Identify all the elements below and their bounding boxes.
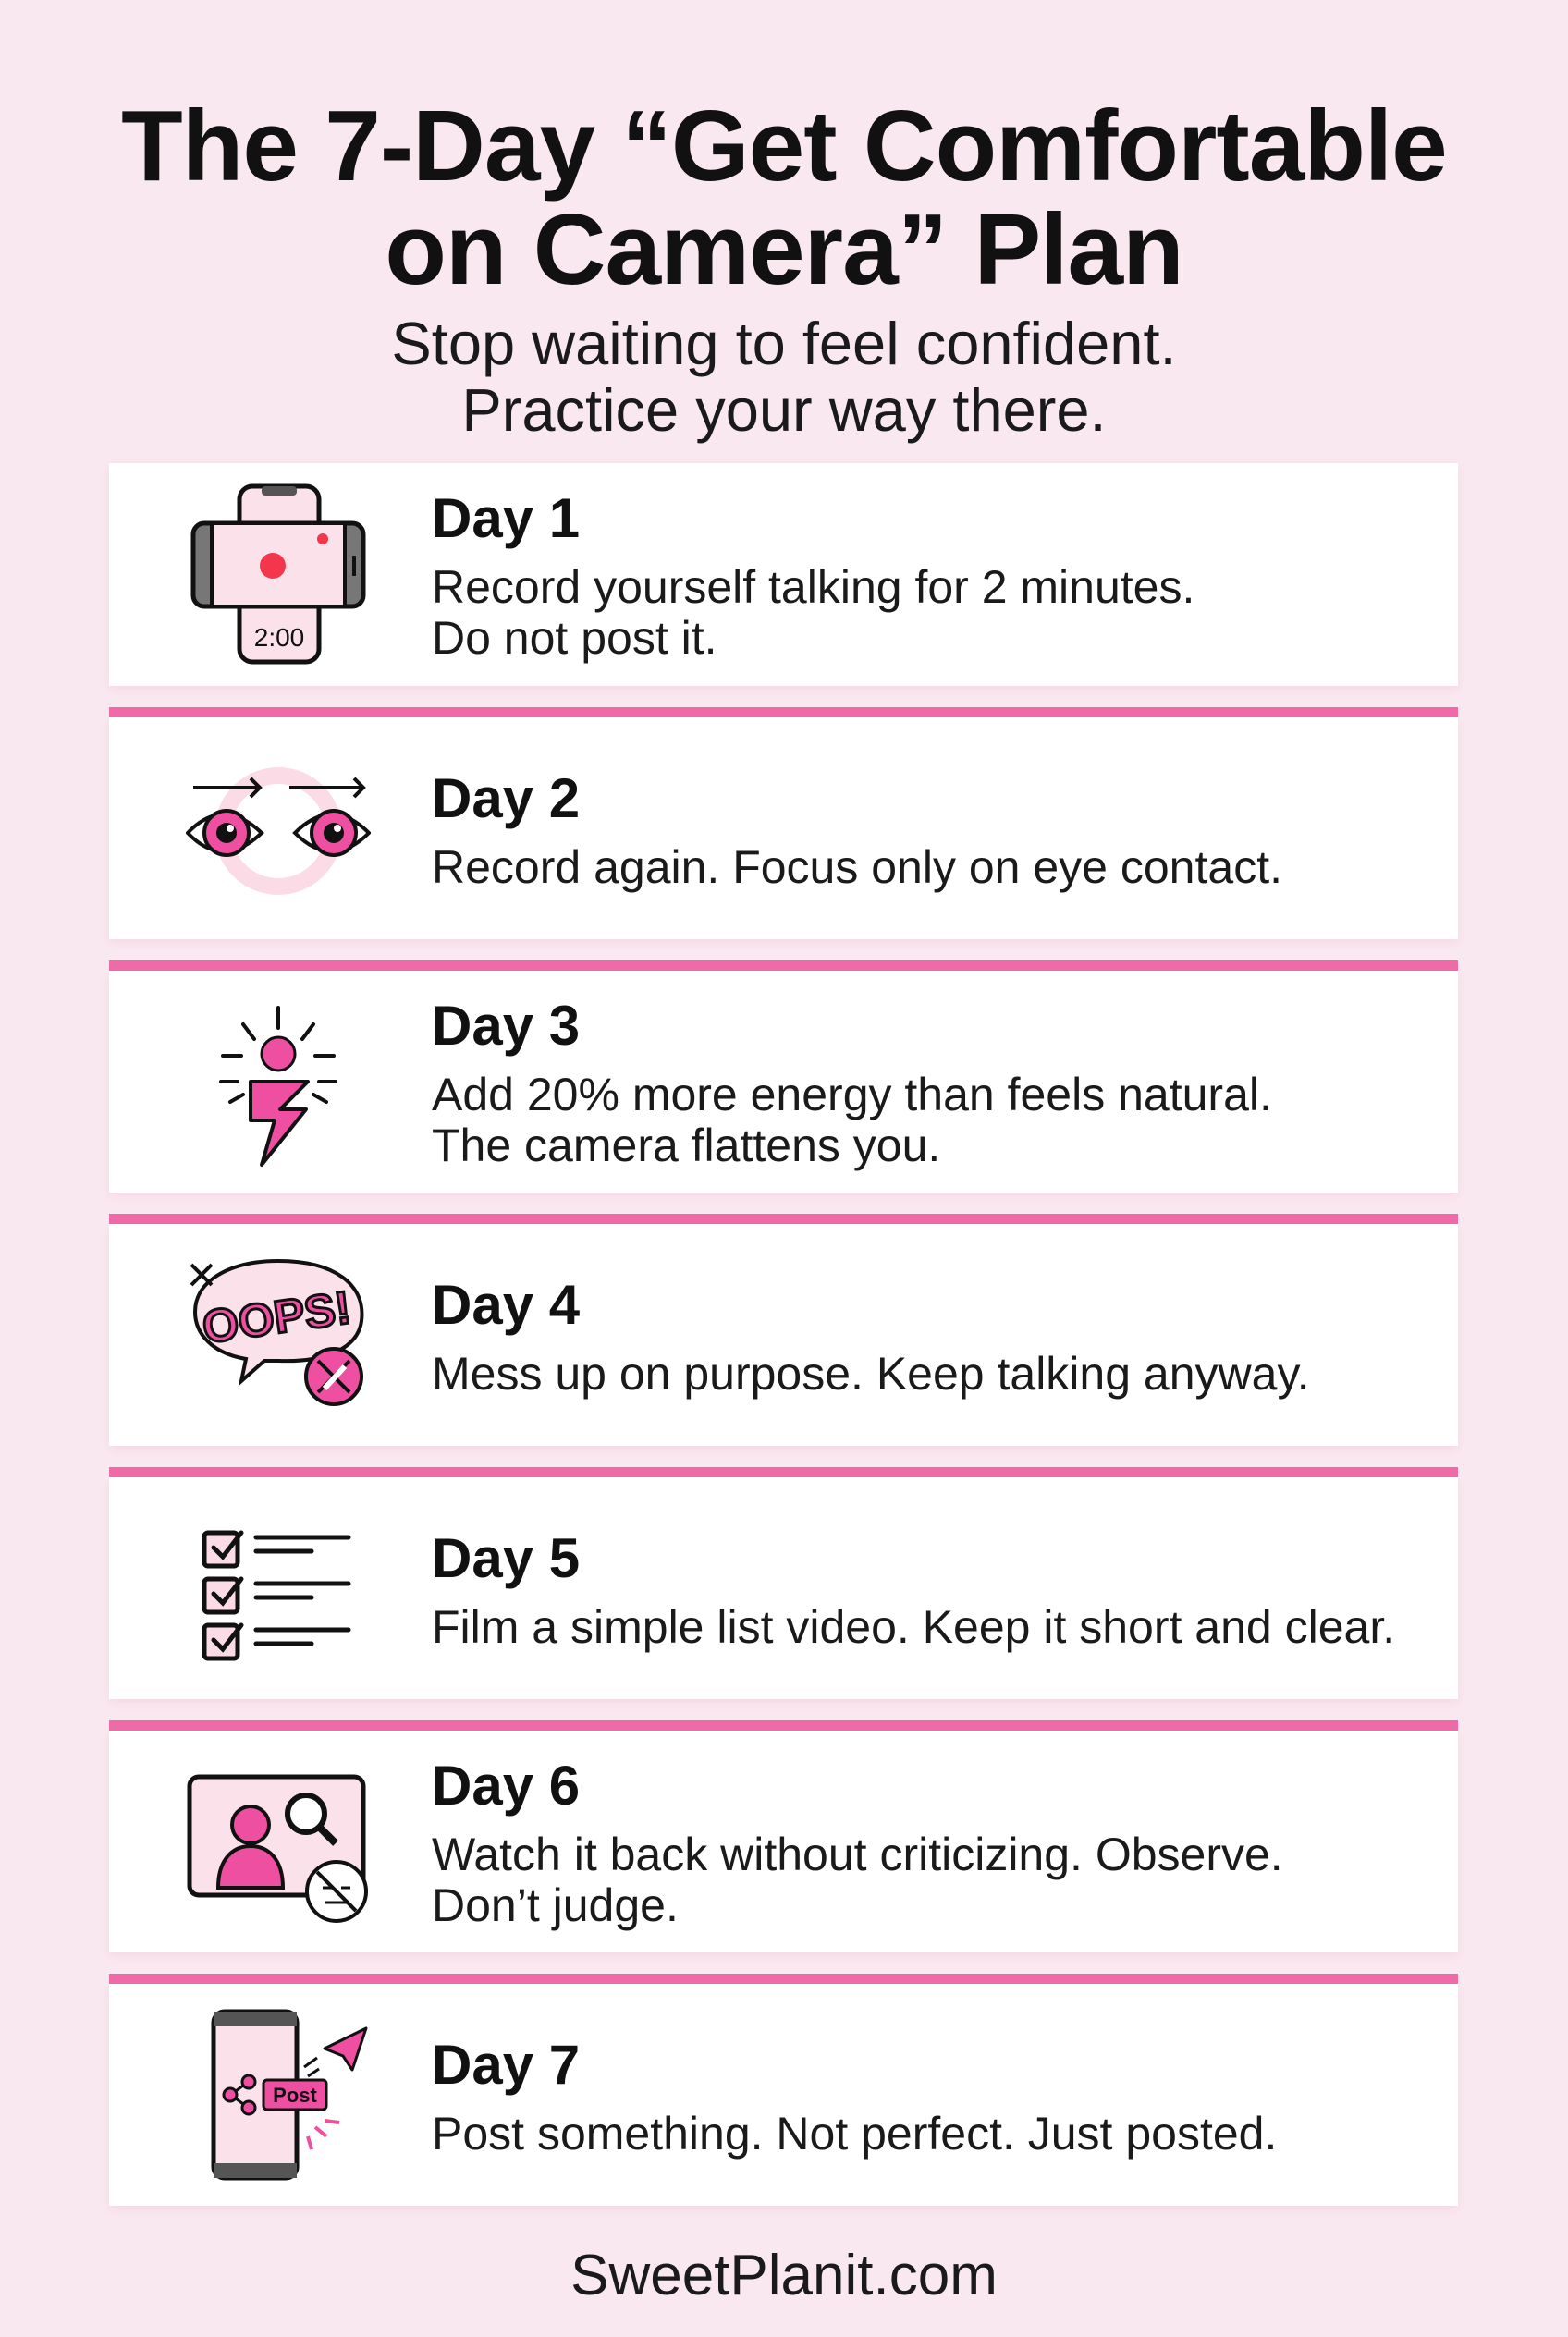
text: day 6 xyxy=(432,1755,1283,1931)
text: day 4: Day 4 xyxy=(432,1274,580,1335)
divider bar 2 xyxy=(109,960,1458,971)
icon: post phone: Post xyxy=(273,2084,318,2107)
text: day 6: Day 6 xyxy=(432,1755,580,1817)
text: day 1: Do not post it. xyxy=(432,612,717,664)
icon: phone recording xyxy=(190,484,366,664)
text: day 4 xyxy=(432,1274,1310,1400)
icon: post phone xyxy=(211,2010,368,2180)
divider bar 5 xyxy=(109,1720,1458,1731)
text: day 3: Day 3 xyxy=(432,995,580,1057)
icon: watch back xyxy=(187,1775,368,1923)
text: day 5 xyxy=(432,1527,1395,1653)
text: day 7: Day 7 xyxy=(432,2034,580,2095)
text: day 1: Record yourself talking for 2 minutes. xyxy=(432,561,1194,613)
panel: day 5 xyxy=(109,1477,1458,1699)
icon: energy xyxy=(219,1006,337,1167)
divider bar 1 xyxy=(109,707,1458,717)
subtitle: Stop waiting to feel confident. xyxy=(391,310,1177,377)
text: day 2 xyxy=(432,767,1282,893)
text: day 3: Add 20% more energy than feels natural. xyxy=(432,1069,1272,1120)
icon: phone recording: 2:00 xyxy=(254,623,304,652)
text: day 7 xyxy=(432,2034,1277,2160)
panel: day 4 xyxy=(109,1224,1458,1446)
text: day 7: Post something. Not perfect. Just posted. xyxy=(432,2108,1277,2160)
text: day 4: Mess up on purpose. Keep talking anyway. xyxy=(432,1348,1310,1400)
divider bar 3 xyxy=(109,1214,1458,1224)
title: on Camera” Plan xyxy=(385,193,1183,306)
text: day 6: Don’t judge. xyxy=(432,1879,679,1931)
text: day 1 xyxy=(432,487,1194,664)
title xyxy=(121,90,1447,306)
icon: eyes xyxy=(186,767,371,895)
text: day 6: Watch it back without criticizing. Observe. xyxy=(432,1829,1283,1880)
footer: SweetPlanit.com xyxy=(570,2244,998,2307)
panel: day 3 xyxy=(109,971,1458,1193)
panel: day 1 xyxy=(109,463,1458,686)
panel: day 6 xyxy=(109,1731,1458,1952)
divider bar 6 xyxy=(109,1974,1458,1984)
text: day 3: The camera flattens you. xyxy=(432,1120,940,1171)
text: day 2: Record again. Focus only on eye contact. xyxy=(432,841,1282,893)
title: The 7-Day “Get Comfortable xyxy=(121,90,1447,202)
text: day 3 xyxy=(432,995,1272,1171)
text: day 5: Day 5 xyxy=(432,1527,580,1588)
text: day 1: Day 1 xyxy=(432,487,580,549)
subtitle xyxy=(391,310,1177,444)
subtitle: Practice your way there. xyxy=(461,376,1107,444)
icon: oops bubble: OOPS! xyxy=(199,1281,354,1353)
panel: day 7 xyxy=(109,1984,1458,2206)
icon: oops bubble xyxy=(190,1259,364,1406)
icon: checklist xyxy=(202,1531,351,1660)
text: day 5: Film a simple list video. Keep it short and clear. xyxy=(432,1601,1395,1653)
text: day 2: Day 2 xyxy=(432,767,580,828)
divider bar 4 xyxy=(109,1467,1458,1477)
panel: day 2 xyxy=(109,717,1458,939)
